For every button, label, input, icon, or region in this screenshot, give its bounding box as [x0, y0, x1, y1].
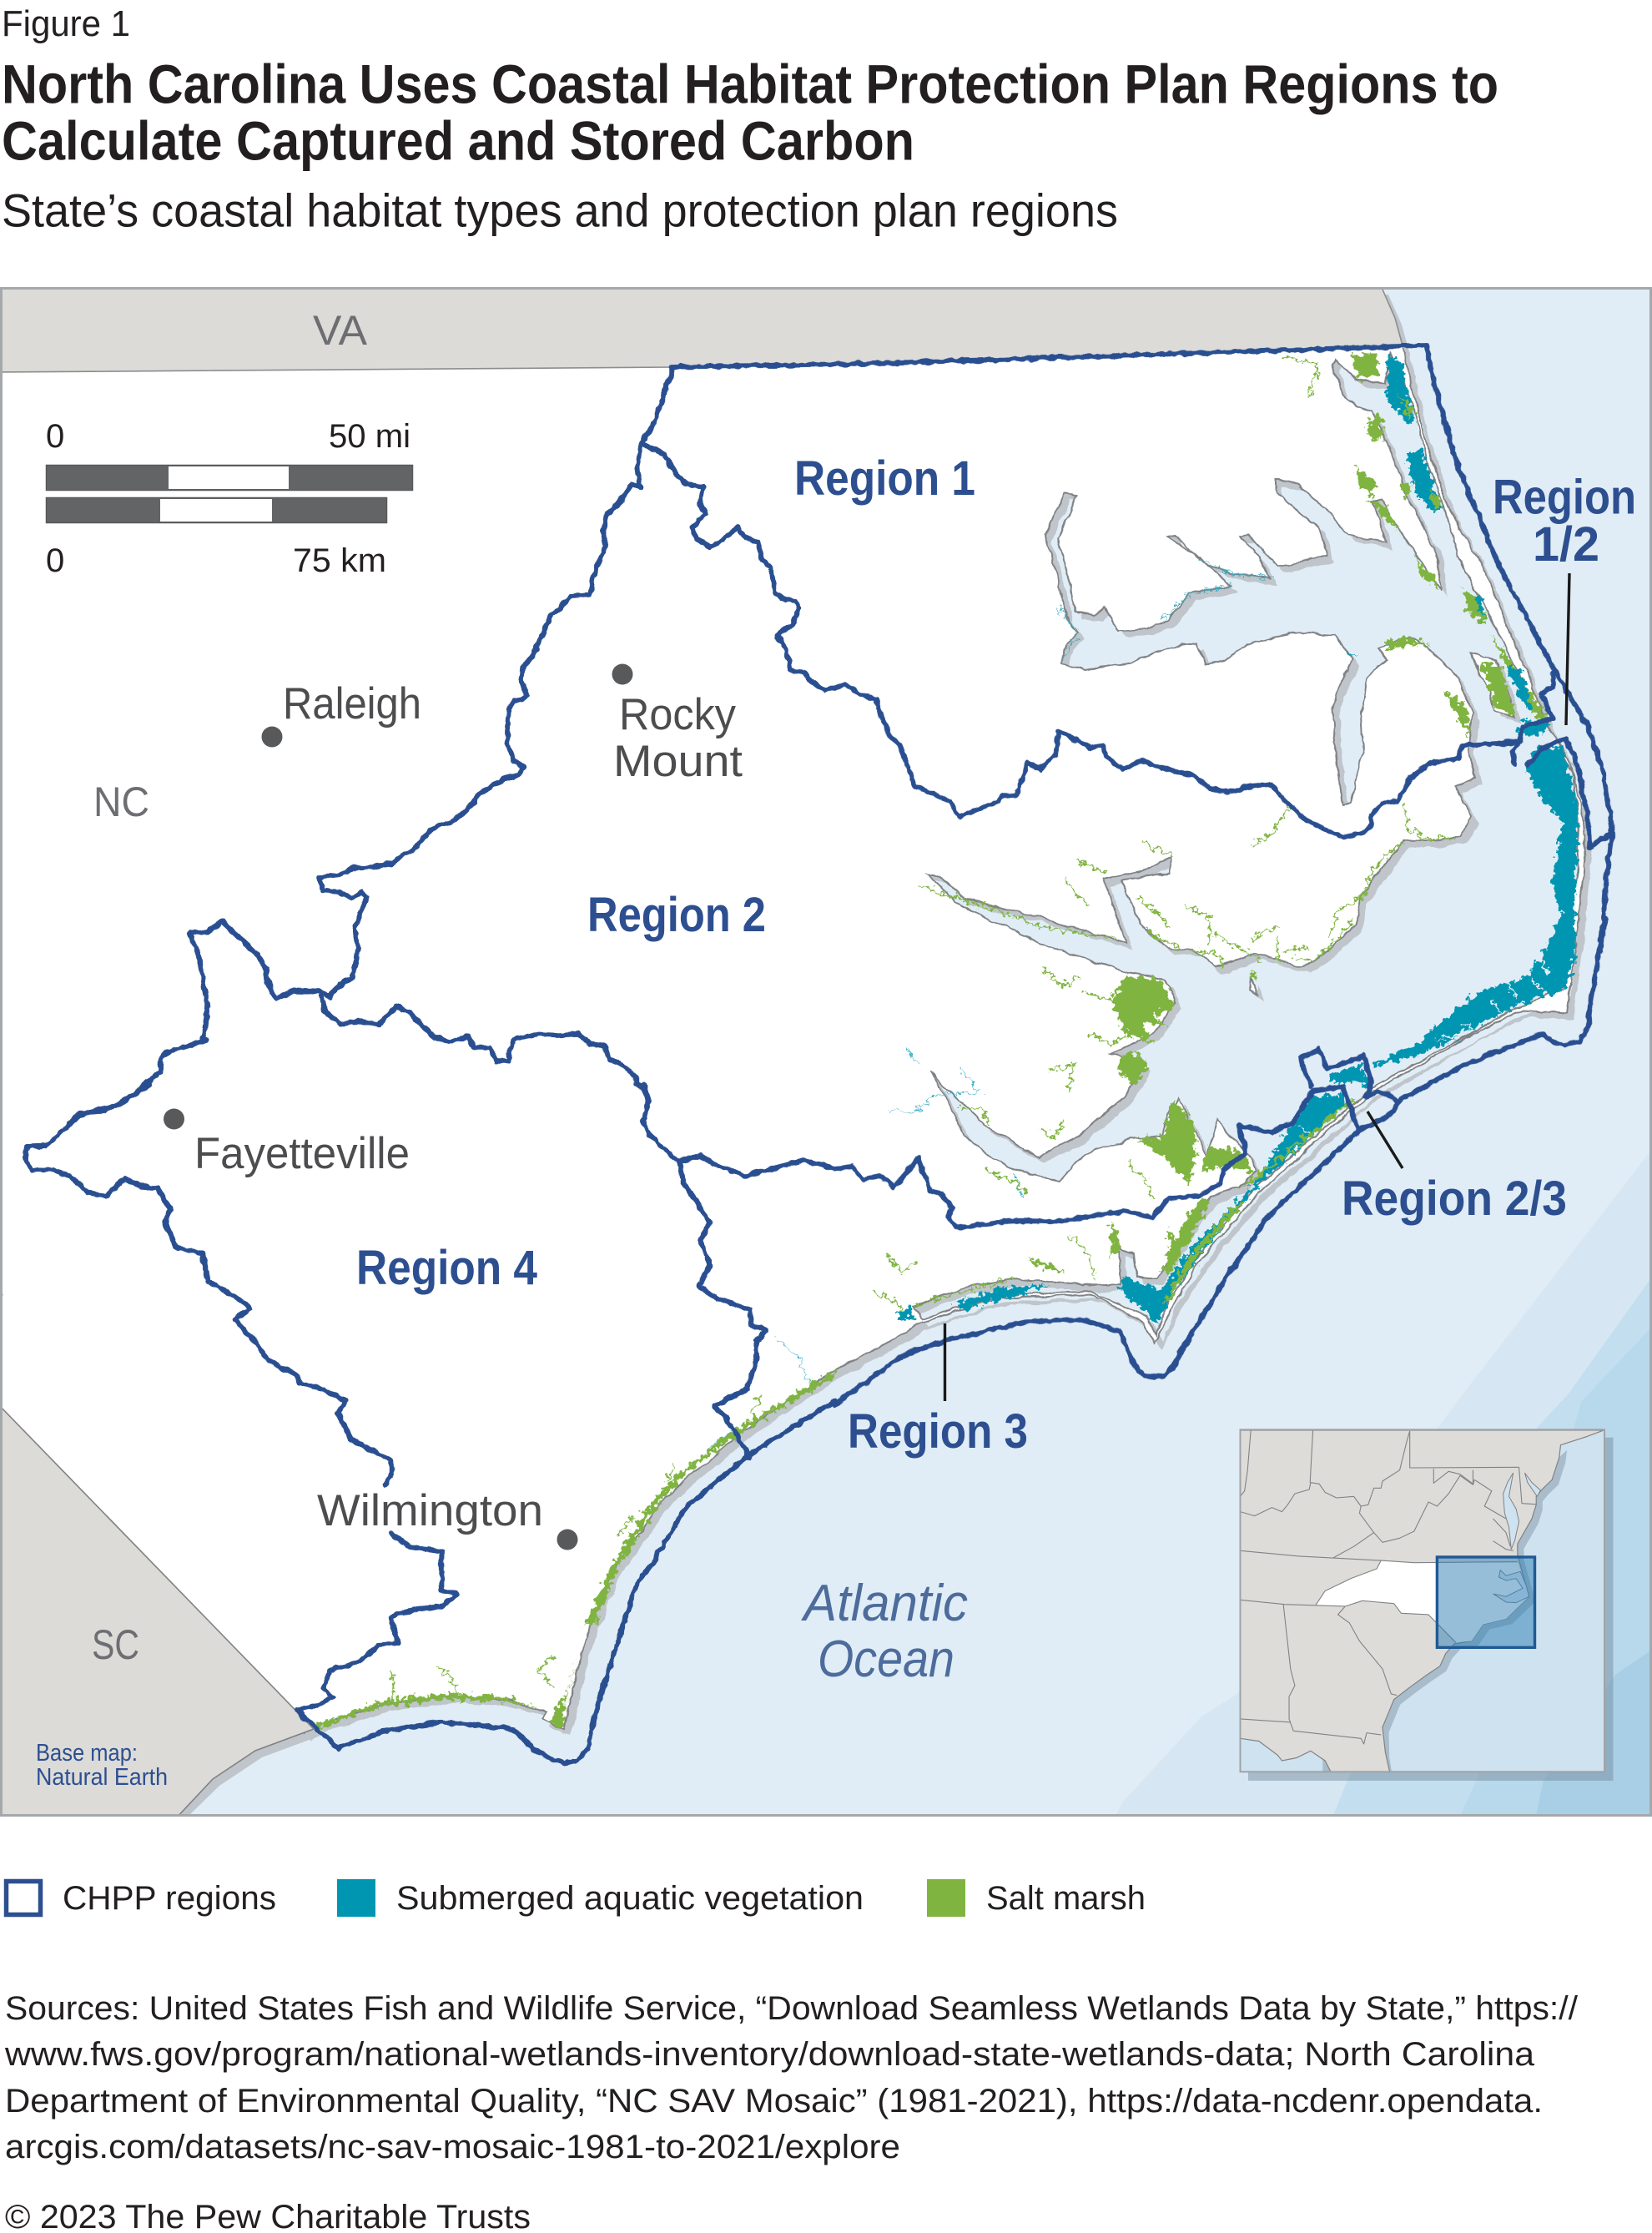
scale bar: 0	[46, 542, 64, 579]
scale bar: 50 mi	[329, 418, 410, 455]
inset land	[1240, 1430, 1604, 1772]
North Carolina land with shadow	[0, 340, 1592, 1741]
legend: submerged aquatic vegetation: Submerged aquatic vegetation	[396, 1880, 864, 1917]
city: Wilmington: Wilmington	[317, 1486, 543, 1535]
sources: Department of Environmental Quality, “NC SAV Mosaic” (1981-2021), https://data-ncdenr.opendata.	[5, 2083, 1543, 2120]
sources	[4, 1990, 1579, 2165]
inset North Carolina	[1316, 1561, 1529, 1642]
inset locator map	[1240, 1429, 1614, 1781]
base map credit	[36, 1740, 168, 1791]
title	[2, 53, 1498, 172]
inset coast shadow	[1322, 1450, 1567, 1772]
title: North Carolina Uses Coastal Habitat Protection Plan Regions to	[2, 53, 1498, 115]
region labels: Region 2/3	[1342, 1172, 1567, 1226]
legend: salt marsh: Salt marsh	[986, 1880, 1146, 1917]
panel: map	[0, 284, 1652, 1822]
region labels: Region 4	[356, 1241, 537, 1295]
region boundaries: northeast	[672, 345, 1612, 951]
city: Raleigh: Raleigh	[283, 679, 421, 728]
South Carolina land	[0, 1402, 314, 1819]
scale bar: 0	[46, 418, 64, 455]
legend: CHPP regions: CHPP regions	[63, 1880, 276, 1917]
inset bays	[1503, 1473, 1519, 1550]
base map credit: Natural Earth	[36, 1764, 168, 1791]
city: Fayetteville	[164, 1108, 410, 1178]
region boundaries: western and central	[74, 367, 834, 1118]
region labels: Region	[1493, 471, 1636, 524]
city: Rocky Mount	[612, 664, 743, 786]
ocean depth bands	[1116, 1149, 1652, 1816]
region boundaries: southeast	[834, 918, 1605, 1405]
region labels: Region 2	[587, 888, 766, 942]
city: Rocky Mount: Mount	[613, 737, 743, 786]
inset state lines	[1240, 1429, 1536, 1744]
region labels: Region 1	[794, 451, 975, 506]
city: Fayetteville: Fayetteville	[194, 1129, 410, 1178]
subtitle: State’s coastal habitat types and protection plan regions	[2, 184, 1118, 237]
region labels: 1/2	[1533, 517, 1599, 572]
state labels: VA	[313, 307, 368, 354]
region labels	[356, 451, 1636, 1459]
ocean label: Atlantic	[800, 1575, 968, 1632]
city: Rocky Mount: Rocky	[619, 690, 736, 739]
city: Raleigh	[262, 679, 421, 748]
figure label: Figure 1	[2, 3, 130, 44]
title: Calculate Captured and Stored Carbon	[2, 110, 914, 172]
scale bar	[46, 418, 412, 579]
Virginia land	[0, 284, 1403, 372]
ocean label	[800, 1575, 968, 1688]
inset shadow	[1248, 1438, 1614, 1781]
Virginia and South Carolina coast shadow	[181, 295, 1409, 1814]
sources: arcgis.com/datasets/nc-sav-mosaic-1981-to-2021/explore	[5, 2129, 900, 2165]
region boundaries: southwest	[25, 1085, 834, 1763]
state labels: SC	[92, 1621, 139, 1668]
inset study area box	[1437, 1557, 1535, 1647]
habitat: southern salt marsh and SAV	[871, 918, 1575, 1323]
inset frame	[1240, 1429, 1604, 1772]
habitat: northern salt marsh and SAV	[920, 354, 1578, 951]
state labels	[92, 307, 368, 1668]
legend	[7, 1879, 1146, 1917]
region labels: Region 3	[848, 1404, 1028, 1459]
leader lines	[944, 573, 1569, 1401]
habitats: salt marsh and submerged aquatic vegetation	[314, 354, 1578, 1729]
map frame	[2, 289, 1650, 1816]
ocean label: Ocean	[818, 1631, 954, 1688]
ocean background	[190, 290, 1649, 1814]
region boundaries	[25, 345, 1613, 1763]
state labels: NC	[93, 779, 149, 825]
city: Wilmington	[317, 1486, 577, 1550]
sources: www.fws.gov/program/national-wetlands-inventory/download-state-wetlands-data; North Carolina	[4, 2036, 1535, 2073]
habitat: southwestern salt marsh	[314, 1338, 834, 1729]
scale bar: 75 km	[293, 542, 386, 579]
base map credit: Base map:	[36, 1740, 138, 1767]
sources: Sources: United States Fish and Wildlife Service, “Download Seamless Wetlands Data by State,” https://	[5, 1990, 1579, 2027]
